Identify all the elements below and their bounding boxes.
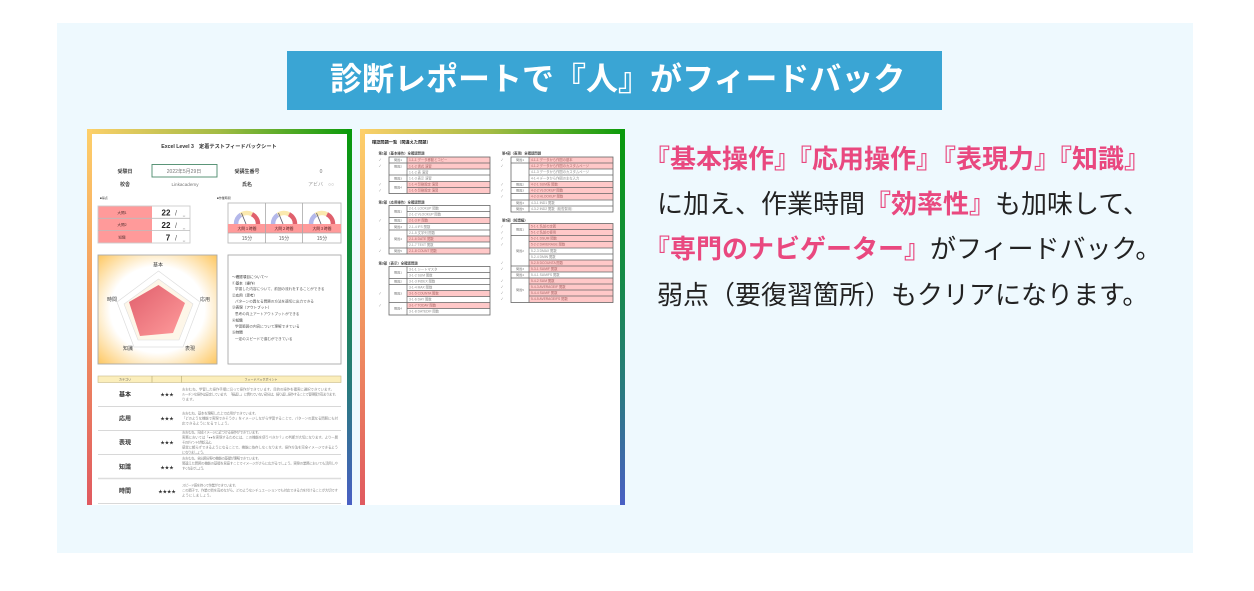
section 2 table: 2-1-3 IF 関数 (409, 218, 429, 223)
working time gauges: 15分 (242, 235, 252, 242)
title banner: 診断レポートで『人』がフィードバック (330, 61, 905, 97)
section 5 table: 5-4-5 AVERAGEIFS 関数 (531, 296, 568, 301)
section 2 table: 2-1-2 VLOOKUP 関数 (409, 212, 442, 217)
section 3 table: 問題3 (394, 291, 402, 296)
section 3 table: 問題1 (394, 270, 402, 275)
section 5 table: 5-2-5 DCOUNTA 関数 (531, 260, 564, 265)
feedback table: すくなるでしょう。 (182, 466, 206, 470)
feedback table: 応用 (119, 416, 131, 422)
section 4 table: 第4部（表現）全確認問題 (502, 150, 542, 156)
working time gauges: 15分 (317, 235, 327, 242)
assessment criteria box: ～確認項目について～ (232, 274, 268, 279)
exam info: 受講生番号 (234, 168, 260, 175)
section 5 table: ✓ (501, 291, 504, 295)
working time gauges: 15分 (279, 235, 289, 242)
section 2 table: ✓ (379, 249, 382, 253)
section 2 table: 問題3 (394, 224, 402, 229)
section 2 table: 2-1-6 DATE 関数 (409, 236, 434, 241)
section 5 table: 5-4-4 SUMIF 関数 (531, 290, 558, 295)
assessment criteria box: ⑤時間 (232, 330, 243, 334)
section 5 table: ✓ (501, 267, 504, 271)
score table: / (175, 236, 177, 242)
section 4 table: ✓ (501, 194, 504, 198)
sheet title: Excel Level 3 定着テストフィードバックシート (161, 142, 277, 150)
working time gauges: 大問１時間 (238, 226, 257, 231)
section 2 table: 問題4 (394, 236, 402, 241)
radar chart panel: 知識 (123, 345, 133, 352)
feedback table: この調子で、作業の質を高めながら、どのようなシチュエーションでも対応できる力を付けることが大切です (182, 488, 339, 492)
feedback table: おおむね、基本を理解した上で応用ができています。 (182, 410, 258, 416)
section 5 table: 問題1 (516, 227, 524, 232)
section 4 table: 4-2-3 HLOOKUP 関数 (531, 194, 564, 199)
score table: xx (183, 215, 186, 218)
section 4 table: 問題3 (516, 188, 524, 193)
section 4 table (501, 150, 613, 212)
gradient frame (87, 129, 352, 505)
feedback table: スピード感を持って作業ができています。 (182, 482, 238, 488)
feedback table: 「どのような機能で実現できそうか」をイメージしながら学習することで、パターンの異なる問題にも対 (182, 416, 339, 420)
section 3 table (378, 260, 490, 315)
exam info (100, 164, 334, 200)
feedback table: ★★★ (160, 416, 174, 421)
list title: 確認問題一覧（間違えた問題） (372, 138, 431, 146)
line 4: weak points: 弱点（要復習箇所）もクリアになります。 (657, 280, 1148, 310)
gradient frame (360, 129, 625, 505)
feedback table: 実務においては「●●を実現するためには、この機能を使うべきか？」の判断が大切になります。より一層 (182, 434, 338, 440)
exam info: 校舎 (120, 181, 130, 188)
section 5 table: 第5部（知識編） (502, 218, 528, 222)
line 1: highlighted skills (644, 144, 1150, 174)
section 5 table: ✓ (501, 297, 504, 301)
feedback table: になりましょう。 (182, 450, 206, 454)
exam info: 受験日 (117, 168, 133, 175)
line 1: highlighted skills: 『知識』 (1046, 144, 1150, 174)
section 3 table: 問題2 (394, 279, 402, 284)
section 5 table: 5-1-1 名前の定義 (531, 224, 557, 229)
exam info: 氏名 (242, 181, 252, 188)
working time gauges (228, 203, 341, 243)
radar chart panel: 時間 (107, 297, 117, 303)
feedback table: ★★★ (160, 465, 174, 470)
section 1 table: 1-1-4 印刷設定 演習 (409, 182, 438, 187)
line 1: highlighted skills: 『表現力』 (930, 144, 1060, 174)
description text (644, 144, 1161, 310)
line 1: highlighted skills: 『応用操作』 (786, 144, 942, 174)
feedback table (98, 376, 341, 504)
section 5 table: 問題5 (516, 287, 524, 292)
radar chart panel: 応用 (200, 297, 210, 303)
assessment criteria box: 思考の向上アートアウトプットができる (235, 311, 300, 316)
feedback table: 表現 (119, 438, 131, 446)
feedback table: おおむね、全出題分野の機能の基礎が理解できています。 (182, 456, 261, 460)
radar chart panel: 表現 (185, 345, 195, 352)
section 4 table: 問題1 (516, 157, 524, 162)
section 3 table: ✓ (379, 292, 382, 296)
section 3 table: 3-1-2 SUM 関数 (409, 273, 433, 278)
section 2 table: 問題2 (394, 218, 402, 223)
section 5 table: 問題4 (516, 272, 524, 277)
section 3 table: 3-1-7 TODAY 関数 (409, 303, 437, 308)
section 5 table: 5-2-1 DSUM 関数 (531, 236, 558, 241)
section 2 table (378, 200, 490, 254)
score table: 大問2 (117, 222, 127, 227)
section 1 table: ✓ (379, 164, 382, 168)
feedback table: ★★★★ (158, 489, 176, 494)
section 4 table: ✓ (501, 182, 504, 186)
assessment criteria box: ②応用（思考） (232, 292, 257, 298)
section 5 table: ✓ (501, 285, 504, 289)
section 1 table: 問題4 (394, 184, 402, 190)
section 2 table: 問題5 (394, 248, 402, 253)
gauge 2 (273, 213, 295, 224)
section 5 table: 5-2-2 DAVERAGE 関数 (531, 242, 566, 247)
section 3 table: 問題4 (394, 306, 402, 311)
feedback table: ★★★ (160, 392, 174, 397)
radar chart panel: 基本 (153, 262, 163, 268)
section 5 table: ✓ (501, 224, 504, 228)
section 1 table: 1-1-5 印刷設定 演習 (409, 188, 438, 193)
assessment criteria box (228, 255, 341, 364)
gauge 1 (236, 213, 258, 224)
section 4 table: 4-3-2 IND2 関数（総復習用） (531, 206, 574, 211)
section 2 table: ✓ (379, 218, 382, 222)
score table (98, 206, 190, 243)
feedback table: 時間 (119, 487, 131, 495)
section 5 table: 5-3-1 SUMIF 関数 (531, 266, 558, 271)
section 5 table: ✓ (501, 261, 504, 265)
section 5 table: ✓ (501, 230, 504, 234)
score table: 7 (166, 234, 171, 242)
exam info: アビバ ○○ (308, 181, 334, 188)
section 3 table: 3-1-1 シートマスタ (409, 267, 437, 272)
section 1 table: 第1部（基本操作）全確認問題 (378, 150, 425, 156)
section 5 table: 問題2 (516, 248, 524, 253)
assessment criteria box: ③表現（アウトプット） (232, 304, 272, 310)
assessment criteria box: 学習した内容について、前回の流れをすることができる (235, 286, 325, 291)
assessment criteria box: 学習範囲の内容について理解できている (235, 324, 300, 328)
exam info: ■作業時間 (217, 195, 231, 200)
section 1 table: ✓ (379, 158, 382, 162)
assessment criteria box: ④知識 (232, 318, 243, 322)
exam info: ■得点 (100, 195, 108, 200)
section 3 table: 3-1-3 INDEX 関数 (409, 279, 436, 284)
section 1 table: 1-1-2 書式 演習 (409, 163, 432, 168)
feedback table: ります。 (182, 396, 196, 402)
feedback table: 感覚に頼らずできるようになることで、機能に依存しなくなります。操作方法を完全イメージできるよう (182, 444, 338, 450)
section 4 table: 問題4 (516, 200, 524, 205)
section 3 table: 3-1-8 DATEDIF 関数 (409, 309, 440, 314)
section 4 table: 4-1-2 データから作図のカスタムページ (531, 163, 590, 168)
section 3 table: 3-1-6 DAY 関数 (409, 297, 432, 302)
section 1 table: 問題2 (394, 164, 402, 168)
section 2 table: 第2部（応用操作）全確認問題 (378, 200, 425, 204)
exam info: Linkacademy (171, 182, 199, 187)
score table: xx (183, 228, 186, 230)
section 1 table: ✓ (379, 188, 382, 192)
line 2: efficiency: に加え、作業時間『効率性』も加味して、 (657, 189, 1149, 219)
section 5 table: 5-2-3 DMAX 関数 (531, 248, 557, 253)
feedback table: フィードバックポイント (245, 377, 277, 382)
section 4 table: 4-1-1 データから作図の基本 (531, 157, 573, 162)
section 4 table: ✓ (501, 164, 504, 168)
section 2 table: 2-1-8 COUNT 関数 (409, 248, 437, 253)
section 1 table (378, 150, 490, 194)
gauge 3 (311, 213, 333, 224)
section 4 table: 4-1-4 データから作図の主な入力 (531, 176, 579, 180)
section 1 table: ✓ (379, 182, 382, 186)
score table: 知識 (118, 234, 126, 240)
section 1 table: 1-1-3 表示 演習 (409, 176, 432, 180)
exam info: 2022年5月29日 (167, 168, 201, 175)
working time gauges: 大問２時間 (275, 226, 294, 231)
radar chart panel (98, 255, 217, 364)
section 5 table: ✓ (501, 279, 504, 283)
section 2 table: 2-1-5 文字列 関数 (409, 230, 436, 235)
section 3 table: ✓ (379, 304, 382, 308)
feedback table: 知識 (119, 463, 131, 471)
section 5 table (501, 218, 613, 302)
score table: / (175, 210, 177, 218)
section 5 table: 5-4-1 SUMIFS 関数 (531, 272, 560, 277)
section 3 table: 第3部（表示）全確認問題 (378, 260, 418, 266)
working time gauges: 大問３時間 (313, 226, 332, 231)
report page 1: feedback sheet (87, 129, 352, 505)
section 2 table: 2-1-7 TEXT 関数 (409, 242, 434, 247)
section 4 table: 問題5 (516, 206, 524, 211)
section 3 table: 3-1-4 MAX 関数 (409, 285, 433, 290)
score table: / (175, 223, 177, 230)
feedback table: そのポイントが増えるよ。 (182, 440, 214, 444)
section 5 table: 問題3 (516, 266, 524, 271)
section 1 table: 問題1 (394, 157, 402, 162)
section 4 table: 4-1-3 データから作図のカスタムページ (531, 169, 590, 174)
feedback table: 基本 (119, 390, 131, 398)
section 5 table: ✓ (501, 236, 504, 240)
section 2 table: 2-1-1 LOOKUP 関数 (409, 206, 440, 211)
feedback table: 間違えた問題の機能の基礎を見直すことでイメージがさらに広がるでしょう。実際の業務においても活用しや (182, 460, 339, 466)
section 5 table: ✓ (501, 242, 504, 246)
title banner (287, 51, 942, 110)
section 5 table: 5-1-2 名前の使用 (531, 230, 556, 235)
feedback table: ようにしましょう。 (182, 492, 213, 498)
section 2 table: 2-1-4 IFS 関数 (409, 224, 431, 229)
exam info: 0 (320, 169, 323, 175)
section 4 table: ✓ (501, 188, 504, 192)
section 4 table: ✓ (501, 158, 504, 162)
section 1 table: 1-1-1 データ移動とコピー (409, 157, 447, 162)
feedback table: カテゴリ (119, 377, 131, 382)
report page 2: question review list (360, 129, 625, 505)
score table: 22 (162, 221, 171, 230)
section 5 table: 5-4-2 SUM 関数 (531, 278, 555, 283)
score table: 22 (162, 208, 171, 218)
assessment criteria box: ①基本（操作） (232, 280, 257, 286)
section 4 table: 4-2-1 SUM系 関数 (531, 182, 558, 187)
section 1 table: 1-1-2 表 演習 (409, 169, 428, 174)
assessment criteria box: 一定のスピードで進むができている (235, 336, 293, 341)
section 1 table: 問題3 (394, 176, 402, 180)
feedback table: ルーチンな操作は安定しています。「繰返し」に慣れていない部分は、繰り返し操作することで習得度が高まります。 (182, 392, 338, 396)
line 3: navigator: 『専門のナビゲーター』がフィードバック。 (644, 234, 1161, 264)
section 5 table: 5-2-4 DMIN 関数 (531, 254, 556, 259)
score table: 大問1 (117, 210, 127, 215)
section 4 table: 4-3-1 IND1 関数 (531, 200, 555, 205)
feedback table: おおむね、完成イメージに近づける操作ができています。 (182, 430, 261, 434)
section 2 table: ✓ (379, 237, 382, 241)
section 2 table: 問題1 (394, 209, 402, 214)
section 3 table: 3-1-5 COUNTA 関数 (409, 291, 439, 296)
feedback table: ★★★ (160, 440, 174, 445)
feedback table: おおむね、学習した操作手順に沿って操作ができています。目的の操作を確実に選択できています。 (182, 386, 334, 392)
line 1: highlighted skills: 『基本操作』 (644, 144, 800, 174)
section 4 table: 4-2-2 VLOOKUP 関数 (531, 188, 564, 193)
assessment criteria box: パターンの異なる問題の方法を適切に出力できる (235, 298, 314, 304)
score table: xx (183, 240, 186, 243)
section 5 table: 5-4-3 AVERAGEIF 関数 (531, 284, 566, 289)
section 4 table: 問題2 (516, 182, 524, 187)
feedback table: 応できるようになるでしょう。 (182, 420, 231, 426)
